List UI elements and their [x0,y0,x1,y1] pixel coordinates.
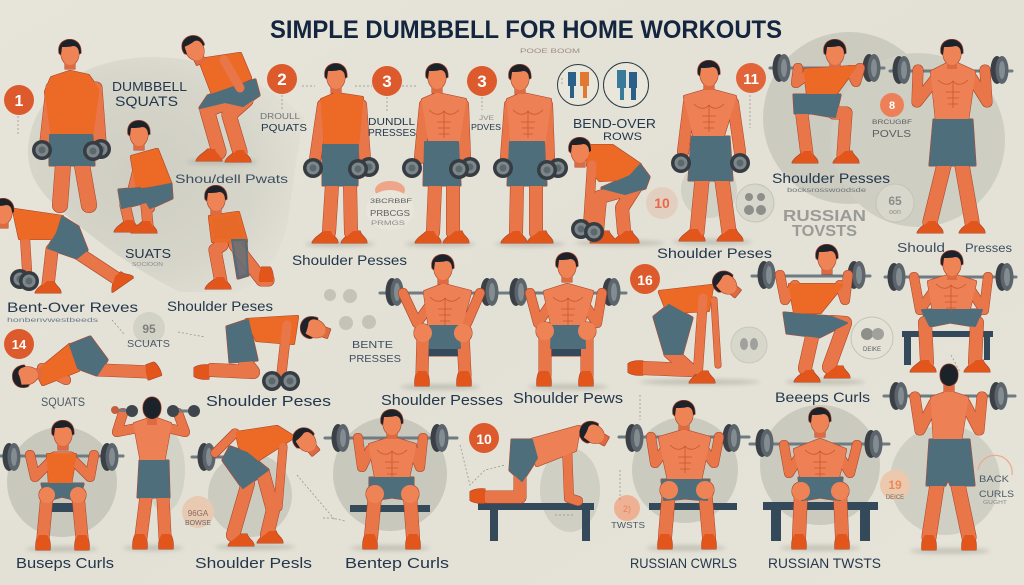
figure 2: bent squat [179,32,259,162]
pale orange badge: bega rows: 96GA [188,509,209,518]
badge 3 second: 3 [477,72,487,91]
label: Shoulder Peses (row 2 center): Shoulder Peses [206,393,331,410]
pale orange badge: twists [614,495,640,521]
icon circle: dumbbells: DEIKE [863,347,881,353]
grey backdrop circle: standing man [681,162,737,218]
badge pale 10 [646,187,678,219]
bench [350,505,430,512]
label: Dundll Presses: DUNDLL [368,117,416,128]
badge 3: 3 [382,72,392,91]
icon: two couples circle [558,64,598,106]
grey backdrop circle: seated left [7,427,117,537]
label: Shoulder Pesses: Shoulder Pesses [292,252,407,268]
grey backdrop circle: russian twists [760,405,880,525]
figure 13: crouched on floor [11,337,162,389]
badge 10: 10 [476,431,492,447]
icon circle: 65: 65 [888,194,902,208]
label: Shoulder Pesses (circle) [772,170,890,194]
label: Presses microtext: PRMGS [371,220,406,227]
subtitle microtext: POOE BOOM [520,49,580,55]
label: Shoulder Peses (top): Shoulder Peses [657,245,772,261]
pale orange badge: 19: DEICE [886,495,904,501]
pale orange blob: presses [366,181,414,230]
figure 9: bent-over row [569,137,649,243]
figure 27: back view barbell [884,364,1015,550]
badge pale 8 [880,93,904,117]
pale orange badge: bega rows [182,496,214,528]
figure 24: hands and knees on bench [470,417,612,541]
grey backdrop circle: bent over [208,453,292,537]
label: Pdves: PDVES [471,123,501,132]
grey backdrop blob: left cluster [28,57,305,292]
label: Pdves [471,116,501,132]
label: Bentep Curls: Bentep Curls [345,555,449,572]
figure 21: back view with dumbbells [111,397,200,549]
dumbbell [571,219,604,242]
badge 1: 1 [15,93,24,110]
badge pale 8: 8 [889,100,895,112]
figure 26: seated barbell twist [750,407,889,549]
badge 14 [4,329,34,359]
figure 8: standing shirtless [493,64,568,243]
figure 18: side barbell squat [752,244,870,382]
bench [649,503,737,510]
label: Russian Cwrls: RUSSIAN CWRLS [630,555,737,571]
badge 3 second [467,66,497,96]
label: Squats: SQUATS [41,395,85,409]
badge 10 [469,423,499,453]
title: SIMPLE DUMBBELL FOR HOME WORKOUTS [270,16,782,44]
figure 4: lunge [205,185,273,289]
grey backdrop circle: top far right [831,53,1005,227]
figure 20: seated barbell small [0,420,123,550]
label: Shoulbell Pwats: Shou/dell Pwats [175,172,288,186]
badge 14: 14 [12,337,27,352]
label: Povls: POVLS [872,129,911,140]
label: Should Presses: Should [897,240,945,255]
label: Bent-Over Reves: honbenvwestbeeds [7,317,99,324]
label: Shoulder Pesls: Shoulder Pesls [195,555,312,572]
label: Back Curls: BACK [979,474,1009,484]
label: Back Curls: GUGHT [983,500,1007,506]
dumbbell right [167,405,200,417]
grey backdrop circle: back view right [890,425,1000,535]
label: Pquats: PQUATS [261,123,307,134]
badge 2 [267,64,297,94]
label: Pquats [260,112,307,134]
label: Shoulder Pews: Shoulder Pews [513,391,623,407]
dashed connector lines [18,78,960,521]
badge 1 [4,85,34,115]
label: Should Presses [897,240,1012,255]
bench [478,503,594,541]
grey backdrop circle: russian curls [632,417,738,523]
badge 11 [736,63,766,93]
label: Russian Tovsts: TOVSTS [792,223,857,240]
label: Bend-Over Rows: BEND-OVER [573,116,656,131]
label: Scuats: SCUATS [127,339,170,350]
label: Dumbbell Squats [112,79,187,109]
figure 17: kneeling forward fold [628,267,745,383]
label: Russian Tovsts: RUSSIAN [783,208,866,225]
pale dumbbell icons [324,289,376,330]
pale orange badge: 19 [880,470,910,501]
label: Back Curls: CURLS [979,489,1014,499]
label: Back Curls [979,474,1014,506]
badge 11: 11 [743,71,759,88]
figure 1: standing with dumbbells [32,39,111,205]
icon: second couple circle [604,62,648,108]
icon circle: dumbbells [851,317,893,359]
label: Suats [125,246,171,268]
label: Bend-Over Rows: ROWS [603,131,642,143]
icon circle: gloves [731,327,767,363]
grey backdrop circle: seated middle [333,417,447,531]
grey backdrop circle: top right [763,32,935,204]
icon circle: 95 squats: 95 [142,322,156,336]
figure 5: bent-over lunge [0,198,134,293]
label: Dundll Presses [368,117,416,139]
figure 12: standing barbell front [890,39,1012,233]
badge 16: 16 [637,272,653,288]
label: Pdves: JVE [479,116,494,122]
label: Shoulder Pesses (circle): bocksrosswoodsde [787,188,867,194]
icon circle: 95 squats [133,312,165,344]
label: Bente Presses: PRESSES [349,354,401,365]
label: Should Presses: Presses [965,241,1012,255]
label: Presses microtext: PRBCGS [370,209,410,218]
label: Pquats: DROULL [260,112,301,121]
label: Beeeps Curls: Beeeps Curls [775,389,870,405]
label: Buseps Curls: Buseps Curls [16,555,114,572]
figure 23: seated barbell [325,409,457,549]
badge 16 [630,264,660,294]
figure 25: seated barbell [619,400,749,549]
pale orange badge: bega rows: BOWSE [185,520,211,527]
label: Shoulder Pesses (circle): Shoulder Pesses [772,170,890,186]
label: Russian Twsts: RUSSIAN TWSTS [768,555,881,571]
dumbbell left [111,405,138,417]
label: Twsts: TWSTS [611,521,645,530]
icon circle: 65 [876,184,914,222]
pale orange badge: 19: 19 [888,478,902,492]
label: Suats: SUATS [125,246,171,261]
label: Presses microtext: 3BCRBBF [370,198,412,205]
label: Bent-Over Reves [7,299,138,324]
figure 10: standing shirtless front [671,60,750,241]
label: Presses microtext [370,198,412,227]
bench [902,331,993,365]
label: Povls: BRCUGBF [872,120,912,126]
grey backdrop circle: back view [145,428,185,512]
label: Shoulder Peses (row 2 left): Shoulder Peses [167,299,273,314]
label: Dumbbell Squats: SQUATS [115,93,178,109]
figure 15: seated barbell [380,254,505,386]
ground shadows [26,159,990,554]
figure 22: bent-over barbell [192,423,324,546]
label: Suats: SOCIOON [132,262,163,268]
label: Russian Tovsts [783,208,866,240]
badge 2: 2 [277,70,287,89]
bench [763,502,878,541]
pale orange badge: twists: 2) [623,504,631,514]
figure 7: standing shirtless [402,63,480,243]
figure 14: kneeling with dumbbell [194,313,333,391]
label: Bente Presses: BENTE [352,340,393,351]
grey backdrop circle: table pose [540,448,600,532]
label: Bend-Over Rows [573,116,656,143]
figure 6: standing with shirt [303,63,379,243]
label: Shoulder Pesses (row 2): Shoulder Pesses [381,392,503,409]
label: Bent-Over Reves: Bent-Over Reves [7,299,138,315]
figure 11: barbell squat [770,39,884,163]
label: Povls [872,120,912,140]
pale ring: back curls [978,455,1012,475]
label: Dundll Presses: PRESSES [368,128,416,139]
badge pale 10: 10 [654,195,670,211]
figure 19: seated on bench with barbell [885,250,1016,372]
icon circle: footprints [736,184,774,222]
icon circle: 65: oon [889,209,901,216]
figure 16: seated barbell [505,252,626,386]
label: Bente Presses [349,340,401,365]
badge 3 [372,66,402,96]
figure 3: small squat [114,120,172,233]
label: Dumbbell Squats: DUMBBELL [112,79,187,94]
